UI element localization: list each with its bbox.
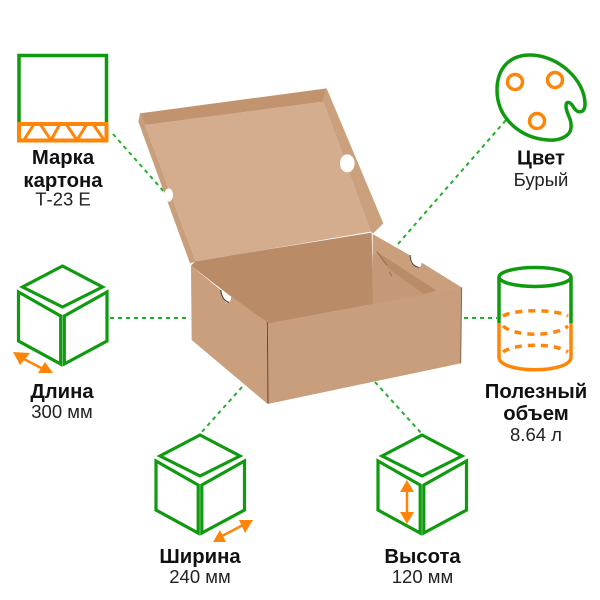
label: cardboard grade: Т-23 Е [35, 188, 91, 210]
label: length: Длина [30, 381, 94, 403]
label: height [384, 546, 461, 587]
label: color: Бурый [514, 169, 568, 190]
label: usable volume [485, 381, 587, 445]
dashed connector lines [110, 120, 506, 434]
label: length: 300 мм [31, 401, 93, 422]
box back wall [191, 233, 373, 327]
label: cardboard grade: Марка [32, 147, 95, 169]
right front face [268, 287, 462, 404]
icon: cardboard grade [19, 56, 106, 140]
cardboard box photo [138, 88, 462, 404]
lid holes [164, 154, 355, 202]
icon: height cube [378, 435, 466, 533]
label: cardboard grade: картона [23, 170, 103, 192]
icon: length cube [13, 266, 107, 373]
label: usable volume: 8.64 л [510, 424, 562, 445]
label: usable volume: объем [503, 403, 569, 425]
label: width: Ширина [159, 546, 241, 568]
label: cardboard grade [23, 147, 103, 210]
icon: palette [497, 55, 585, 140]
lid rims [138, 88, 383, 263]
label: height: Высота [384, 546, 461, 568]
label: color: Цвет [517, 148, 565, 170]
label: width [159, 546, 241, 587]
inner flap [373, 255, 423, 304]
icon: cylinder volume [499, 268, 571, 370]
icon: width cube [156, 435, 253, 542]
label: height: 120 мм [392, 566, 453, 587]
label: color [514, 148, 568, 190]
right wall notch [410, 255, 419, 267]
label: width: 240 мм [169, 566, 231, 587]
box right inner wall [373, 234, 462, 305]
label: length [30, 381, 94, 422]
left front face [191, 266, 268, 404]
label: usable volume: Полезный [485, 381, 587, 403]
lid inner panel [145, 102, 371, 262]
